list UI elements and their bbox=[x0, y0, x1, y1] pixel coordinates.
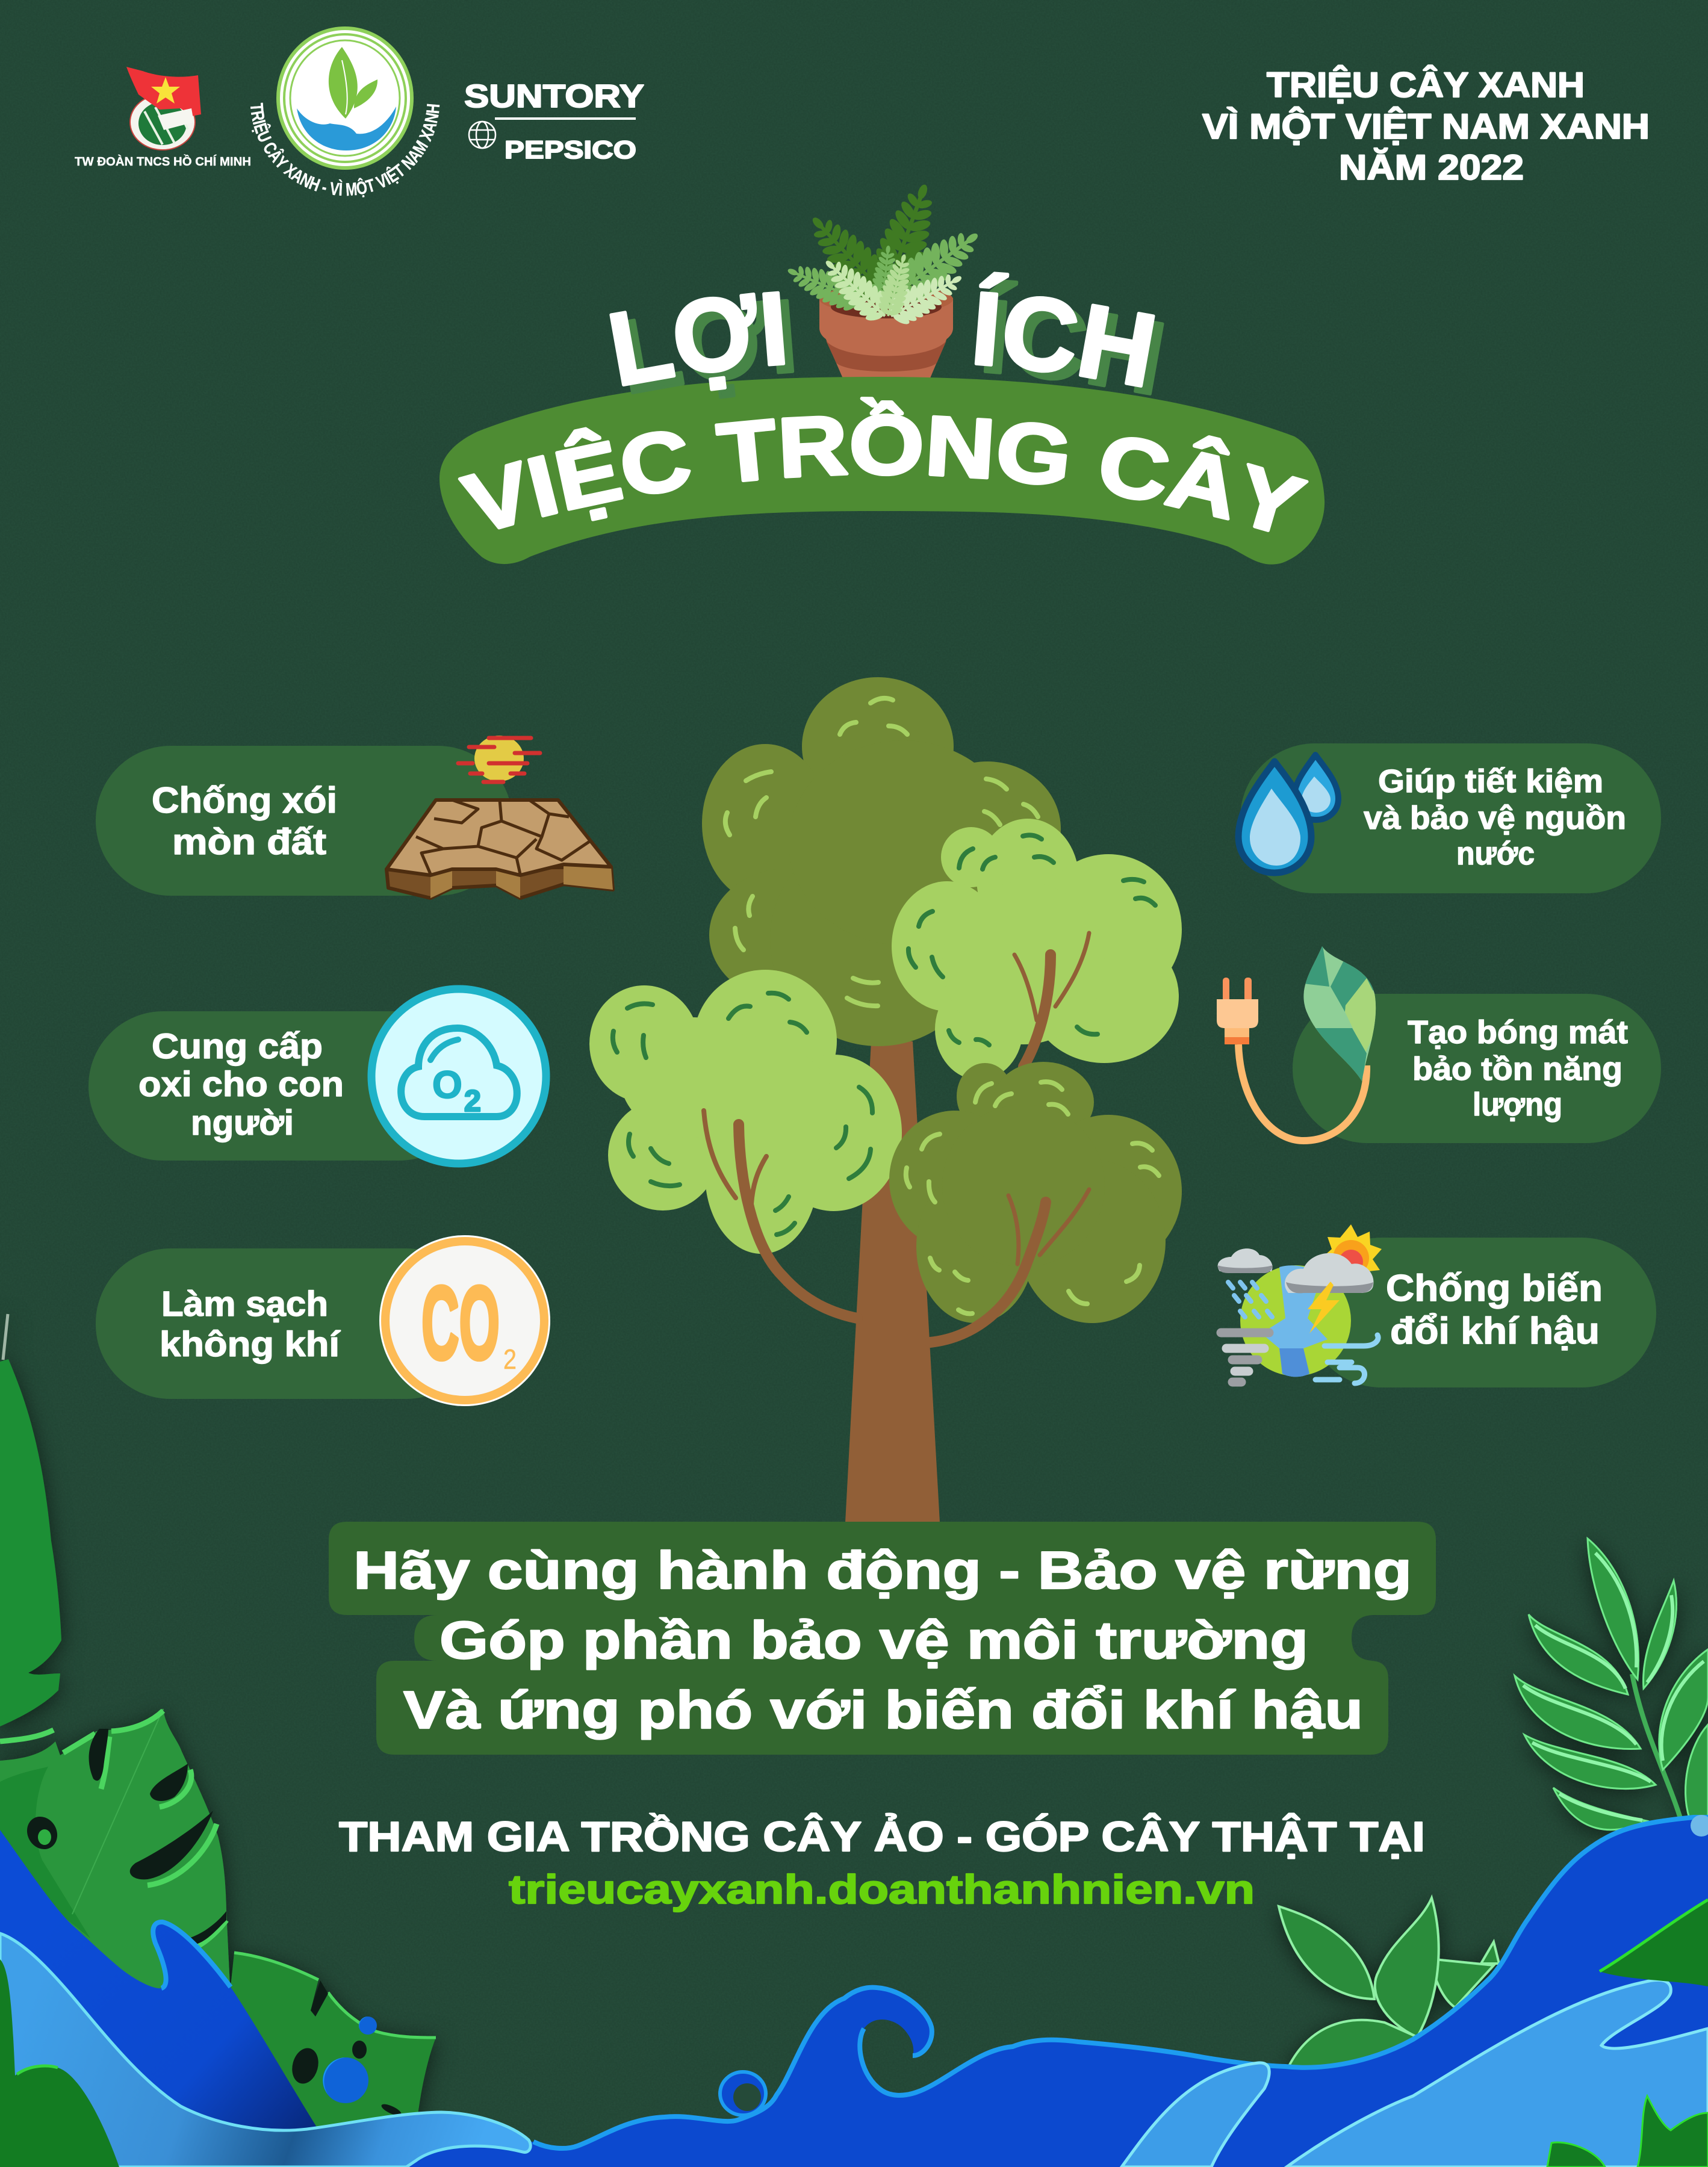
icon: CO2 bbox=[379, 1235, 550, 1406]
light water centre bbox=[1122, 2063, 1269, 2167]
small leaf bbox=[229, 1953, 436, 2143]
label bbox=[1364, 763, 1626, 872]
icon: O2 cloud bbox=[371, 989, 546, 1164]
panel: save water bbox=[1238, 743, 1661, 893]
label: bảo tồn năng bbox=[1412, 1051, 1623, 1087]
label bbox=[152, 780, 337, 862]
label bbox=[1386, 1268, 1603, 1352]
icon: O2 cloud: 2 bbox=[464, 1084, 481, 1118]
icon: cracked earth and sun bbox=[387, 736, 613, 898]
crown: lower right bbox=[889, 1062, 1182, 1342]
title: Loi ich: LỢI bbox=[609, 291, 785, 391]
slogan text bbox=[353, 1540, 1412, 1740]
icon: plug and leaf bbox=[1217, 939, 1385, 1141]
heading: campaign name bbox=[1202, 66, 1650, 187]
light water right bbox=[1287, 1980, 1708, 2167]
label: nước bbox=[1456, 835, 1535, 872]
slogan text: Hãy cùng hành động - Bảo vệ rừng bbox=[353, 1540, 1412, 1600]
icon: water drops bbox=[1238, 755, 1338, 873]
title: Loi ich: LỢI bbox=[628, 299, 795, 398]
text: join campaign: THAM GIA TRỒNG CÂY ẢO - GÓP CÂY THẬT TẠI bbox=[339, 1812, 1425, 1860]
panel: clean air bbox=[96, 1235, 550, 1406]
panel: soil erosion bbox=[96, 736, 613, 898]
heading: campaign name: NĂM 2022 bbox=[1339, 148, 1524, 187]
label: người bbox=[191, 1103, 294, 1142]
label: Chống xói bbox=[152, 780, 337, 820]
panel: call to action bbox=[329, 1522, 1436, 1755]
decoration: water waves bbox=[0, 1815, 1708, 2167]
logo: Doan TNCS Ho Chi Minh bbox=[75, 67, 251, 169]
crown: top bbox=[702, 677, 1061, 1046]
icon: O2 cloud: O bbox=[432, 1063, 462, 1106]
label: lượng bbox=[1473, 1087, 1562, 1123]
label: Giúp tiết kiệm bbox=[1378, 763, 1603, 799]
panel: oxygen bbox=[89, 989, 546, 1164]
slogan text: Và ứng phó với biến đổi khí hậu bbox=[403, 1680, 1363, 1740]
branch bbox=[1014, 933, 1089, 1067]
label: oxi cho con bbox=[138, 1065, 344, 1104]
panel: climate change bbox=[1217, 1224, 1656, 1387]
label: Tạo bóng mát bbox=[1408, 1014, 1628, 1050]
decoration: right fern and leaves bbox=[1279, 1539, 1708, 2071]
branch bbox=[930, 1189, 1089, 1342]
green leaf bottom left bbox=[0, 1959, 119, 2167]
logo arc caption: TRIỆU CÂY XANH - VÌ MỘT VIỆT NAM XANH bbox=[250, 102, 439, 197]
icon: earth and weather bbox=[1217, 1224, 1382, 1383]
title: Loi ich: ÍCH bbox=[974, 271, 1155, 388]
fern bbox=[1515, 1539, 1708, 1830]
green leaf right bbox=[1600, 1900, 1708, 1986]
icon: CO2: CO bbox=[421, 1265, 500, 1381]
label bbox=[1408, 1014, 1628, 1123]
icon: potted fern bbox=[781, 176, 991, 385]
label bbox=[138, 1027, 344, 1142]
green leaves bottom right bbox=[1547, 2096, 1708, 2167]
crown: upper right bbox=[892, 819, 1182, 1080]
logo: Suntory Pepsico: SUNTORY bbox=[464, 78, 644, 114]
logo caption: TW ĐOÀN TNCS HỒ CHÍ MINH bbox=[75, 154, 251, 169]
icon: CO2: 2 bbox=[503, 1344, 517, 1375]
label: Làm sạch bbox=[161, 1285, 328, 1324]
crown: left bbox=[589, 970, 902, 1318]
label bbox=[160, 1285, 341, 1364]
tree trunk bbox=[845, 1041, 940, 1522]
title banner bbox=[439, 377, 1324, 565]
heading: campaign name: VÌ MỘT VIỆT NAM XANH bbox=[1202, 107, 1650, 146]
title: Loi ich bbox=[600, 270, 1173, 417]
text: website: trieucayxanh.doanthanhnien.vn bbox=[509, 1867, 1255, 1912]
heading: campaign name: TRIỆU CÂY XANH bbox=[1267, 66, 1585, 105]
label: Cung cấp bbox=[152, 1027, 323, 1066]
label: không khí bbox=[160, 1325, 341, 1364]
deep water bbox=[0, 1817, 1708, 2167]
logo: Trieu cay xanh bbox=[250, 26, 439, 197]
title: Loi ich: ÍCH bbox=[984, 279, 1164, 395]
label: và bảo vệ nguồn bbox=[1364, 800, 1626, 836]
label: mòn đất bbox=[172, 822, 326, 862]
decoration: left monstera leaves bbox=[0, 1314, 436, 2143]
bubbles bbox=[323, 1815, 1708, 2103]
label: đổi khí hậu bbox=[1390, 1310, 1600, 1352]
illustration: tree bbox=[589, 677, 1182, 1522]
leaves above wave bbox=[1279, 1898, 1499, 2071]
large leaf bbox=[0, 1709, 231, 1998]
label: Chống biến bbox=[1386, 1268, 1603, 1309]
title: Viec trong cay: VIỆC TRỒNG CÂY bbox=[458, 397, 1309, 532]
small curl bbox=[720, 2072, 766, 2115]
branch bbox=[704, 1111, 857, 1318]
panel: shade and energy bbox=[1217, 939, 1661, 1143]
light water left bbox=[0, 1933, 530, 2167]
fern highlights bbox=[1523, 1553, 1704, 1820]
logo: Suntory Pepsico bbox=[464, 78, 644, 164]
upper leaf bbox=[0, 1359, 61, 1726]
logo: Suntory Pepsico: PEPSICO bbox=[505, 135, 636, 164]
slogan text: Góp phần bảo vệ môi trường bbox=[439, 1610, 1308, 1670]
